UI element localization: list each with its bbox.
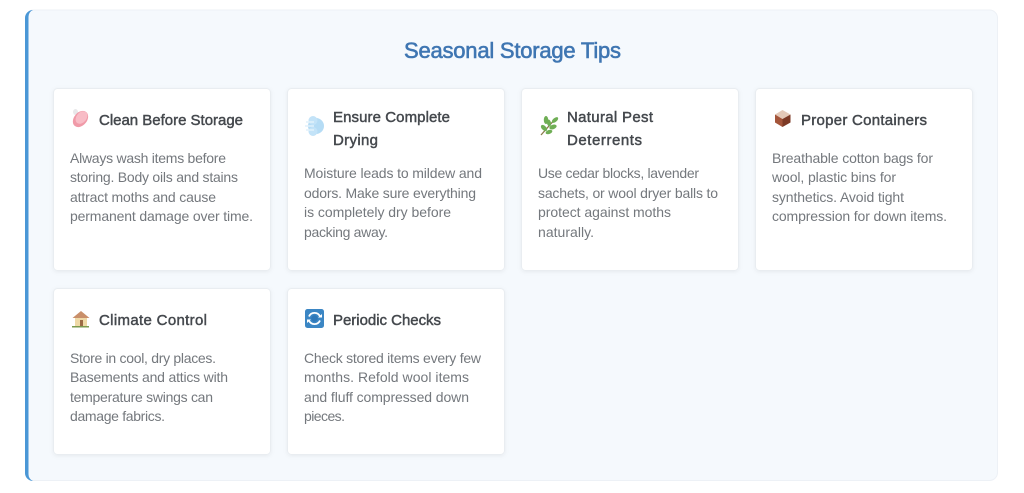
card text: storing. Body oils and stains — [70, 169, 238, 185]
card text: compression for down items. — [772, 208, 947, 224]
title: Seasonal Storage Tips — [404, 38, 621, 63]
card heading: Natural Pest — [567, 109, 654, 126]
icon: house — [72, 311, 90, 328]
card text — [70, 350, 228, 424]
card: natural pest deterrents — [522, 88, 738, 270]
card heading: Drying — [333, 132, 378, 149]
icon: soap — [70, 108, 91, 130]
card heading — [567, 109, 654, 149]
card text: sachets, or wool dryer balls to — [538, 185, 718, 201]
icon: wind — [305, 116, 324, 136]
card heading: Deterrents — [567, 132, 642, 149]
card text: Always wash items before — [70, 150, 226, 166]
card: ensure complete drying — [288, 88, 504, 270]
card text: Basements and attics with — [70, 369, 228, 385]
card text — [304, 165, 482, 240]
card heading: Periodic Checks — [333, 312, 441, 329]
card: proper containers — [756, 88, 972, 270]
icon: box — [775, 110, 790, 127]
icon: refresh — [305, 309, 324, 328]
card text: wool, plastic bins for — [771, 169, 896, 185]
card: clean before storage — [54, 88, 270, 270]
card text — [771, 150, 947, 224]
card heading: Proper Containers — [801, 112, 927, 129]
card heading: Climate Control — [99, 312, 207, 329]
card text: permanent damage over time. — [70, 208, 253, 224]
card text: is completely dry before — [304, 204, 451, 220]
card text: pieces. — [304, 408, 345, 424]
icon: herb — [540, 116, 559, 135]
card text: attract moths and cause — [70, 189, 216, 205]
card text: packing away. — [304, 224, 388, 240]
card text: synthetics. Avoid tight — [772, 189, 904, 205]
card text: Check stored items every few — [304, 350, 482, 366]
card text: damage fabrics. — [70, 408, 165, 424]
card text: and fluff compressed down — [304, 389, 469, 405]
card: periodic checks — [288, 288, 504, 454]
card text: months. Refold wool items — [304, 369, 469, 385]
card text: odors. Make sure everything — [304, 185, 476, 201]
card text: Use cedar blocks, lavender — [538, 165, 699, 181]
card text: naturally. — [538, 224, 594, 240]
card text: Breathable cotton bags for — [772, 150, 933, 166]
card text — [70, 150, 253, 224]
card text: Moisture leads to mildew and — [304, 165, 482, 181]
card text: protect against moths — [538, 204, 671, 220]
card text — [538, 165, 718, 240]
card text — [304, 350, 482, 424]
card heading — [333, 109, 450, 149]
card heading: Ensure Complete — [333, 109, 450, 126]
card heading: Clean Before Storage — [99, 112, 243, 129]
card: climate control — [54, 288, 270, 454]
card text: temperature swings can — [70, 389, 213, 405]
card text: Store in cool, dry places. — [70, 350, 216, 366]
